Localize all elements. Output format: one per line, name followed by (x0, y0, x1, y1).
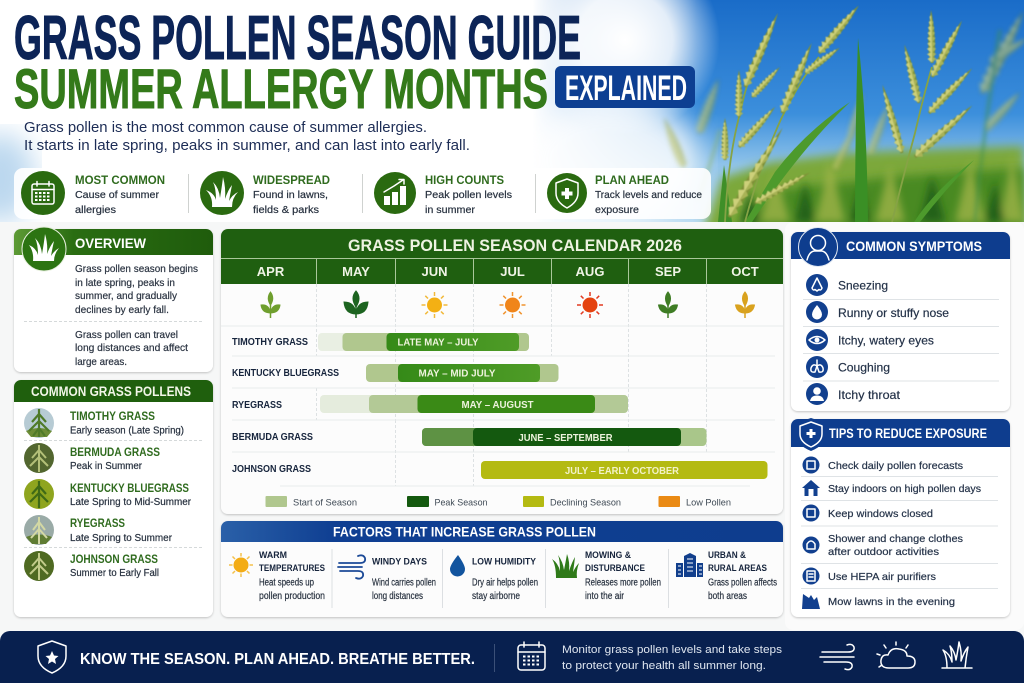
month labels: OCT (731, 264, 759, 279)
symptom: itchy throat (806, 383, 901, 405)
tip: stay indoors: Stay indoors on high pollen days (828, 483, 981, 495)
grass: bermuda: BERMUDA GRASS (70, 447, 160, 459)
factor: windy days: Wind carries pollen (372, 578, 436, 588)
row: ryegrass: MAY – AUGUST (462, 399, 534, 411)
icon: sun and cloud (877, 642, 915, 668)
lower page background (0, 222, 1024, 632)
calendar legend: Start of Season (293, 498, 357, 508)
tip: keep windows closed: Keep windows closed (828, 508, 933, 520)
tip: shower and change clothes: Shower and change clothes (828, 533, 963, 545)
icon: grass (942, 642, 972, 668)
calendar grid (221, 284, 783, 486)
overview text: large areas. (75, 356, 127, 368)
symptom: sneezing: Sneezing (838, 278, 888, 292)
month labels: AUG (576, 264, 604, 279)
tip: shower and change clothes: after outdoor activities (828, 546, 939, 558)
icon: person badge (798, 228, 838, 266)
overview text: summer, and gradually (75, 290, 178, 302)
panel: overview (14, 227, 213, 372)
row: johnson grass: JULY – EARLY OCTOBER (565, 465, 679, 477)
row: bermuda grass: JUNE – SEPTEMBER (518, 432, 613, 444)
factor: urban and rural areas (676, 550, 777, 602)
factor: warm temperatures: pollen production (259, 591, 325, 602)
factor: warm temperatures: WARM (259, 550, 287, 561)
highlight: high counts (374, 172, 512, 216)
factor: mowing and disturbance: MOWING & (585, 550, 631, 561)
panel: common grass pollens (14, 380, 213, 617)
grass: ryegrass: Late Spring to Summer (70, 533, 173, 544)
badge: explained (555, 66, 695, 108)
icon: october leaf (736, 292, 754, 318)
tip: stay indoors (802, 480, 981, 496)
grass: ryegrass: RYEGRASS (70, 518, 125, 530)
footer message: to protect your health all summer long. (562, 660, 766, 672)
calendar legend (266, 496, 731, 508)
highlight: most common: MOST COMMON (75, 175, 165, 187)
calendar legend: Peak Season (434, 498, 488, 508)
icon: august sun (577, 292, 603, 318)
overview text: declines by early fall. (75, 304, 169, 316)
factor: low humidity: stay airborne (472, 591, 520, 602)
icon: april leaf (261, 292, 280, 318)
factors heading: FACTORS THAT INCREASE GRASS POLLEN (333, 524, 596, 540)
symptom: itchy watery eyes (806, 329, 934, 351)
title: SUMMER ALLERGY MONTHS (14, 57, 548, 120)
row: timothy grass (232, 333, 529, 351)
grass: ryegrass (24, 515, 173, 545)
symptom: runny or stuffy nose (806, 301, 949, 323)
highlight: widespread: Found in lawns, (253, 190, 328, 201)
tip: shower and change clothes (802, 533, 963, 558)
calendar legend: Declining Season (550, 498, 621, 508)
icon: wind (820, 644, 854, 670)
factor: mowing and disturbance: Releases more pollen (585, 578, 661, 588)
icon: july sun (500, 292, 526, 318)
overview text: long distances and affect (75, 342, 188, 354)
hero background: sky and grass field (0, 0, 1024, 240)
icon: shield badge (796, 418, 826, 451)
factor: warm temperatures: Heat speeds up (259, 578, 314, 588)
factor: mowing and disturbance: into the air (585, 591, 625, 602)
factor: warm temperatures: TEMPERATURES (259, 563, 325, 574)
badge: explained: EXPLAINED (565, 69, 687, 108)
calendar title: GRASS POLLEN SEASON CALENDAR 2026 (348, 236, 682, 255)
month labels: SEP (655, 264, 681, 279)
foreground seed heads (720, 2, 976, 220)
factor: low humidity: Dry air helps pollen (472, 578, 538, 588)
highlight: widespread: fields & parks (253, 205, 319, 216)
footer banner (0, 631, 1024, 683)
panel: tips to reduce exposure (791, 418, 1010, 617)
factor: windy days: long distances (372, 591, 423, 602)
symptom: itchy watery eyes: Itchy, watery eyes (838, 334, 934, 348)
highlight: high counts: in summer (425, 205, 476, 216)
overview text: Grass pollen can travel (75, 329, 178, 341)
tip: check forecasts: Check daily pollen forecasts (828, 460, 963, 472)
row: bermuda grass (232, 428, 706, 446)
month icons (261, 291, 754, 318)
highlight: widespread: WIDESPREAD (253, 175, 330, 187)
heading: tips to reduce exposure: TIPS TO REDUCE EXPOSURE (829, 426, 987, 441)
month labels (257, 264, 759, 279)
factor: warm temperatures (229, 550, 325, 602)
panel: grass pollen season calendar (221, 229, 783, 514)
month labels: JUL (500, 264, 525, 279)
highlight: plan ahead: Track levels and reduce (595, 190, 702, 201)
heading: common grass pollens: COMMON GRASS POLLENS (31, 384, 191, 399)
overview text: Grass pollen season begins (75, 263, 198, 275)
highlight: plan ahead (547, 173, 702, 216)
heading: common symptoms: COMMON SYMPTOMS (846, 239, 982, 254)
highlight: high counts: Peak pollen levels (425, 190, 512, 201)
row: kentucky bluegrass (232, 364, 558, 382)
factor: low humidity (450, 555, 538, 602)
icon: shield (38, 641, 66, 673)
highlight: most common: Cause of summer (75, 190, 160, 201)
calendar legend: Low Pollen (686, 498, 731, 508)
month labels: APR (257, 264, 285, 279)
icon: grass badge (22, 227, 66, 271)
overview text: in late spring, peaks in (75, 277, 175, 289)
intro text: Grass pollen is the most common cause of summer allergies. (24, 120, 427, 136)
row: johnson grass: JOHNSON GRASS (232, 463, 311, 475)
tip: hepa purifiers: Use HEPA air purifiers (828, 571, 936, 583)
factor: windy days (338, 555, 436, 602)
row: kentucky bluegrass: KENTUCKY BLUEGRASS (232, 367, 339, 379)
panel: common symptoms (785, 222, 1024, 630)
grass: kentucky bluegrass (24, 479, 192, 509)
icon: calendar (518, 642, 545, 670)
row: ryegrass: RYEGRASS (232, 399, 282, 411)
tip: mow lawns in the evening (802, 594, 955, 609)
grass: kentucky bluegrass: KENTUCKY BLUEGRASS (70, 483, 189, 495)
factor: mowing and disturbance (552, 550, 661, 602)
row: kentucky bluegrass: MAY – MID JULY (418, 368, 496, 380)
grass: timothy (24, 408, 184, 438)
highlight: most common: allergies (75, 205, 116, 216)
factor: low humidity: LOW HUMIDITY (472, 556, 537, 568)
tip: keep windows closed (802, 504, 933, 522)
intro text (24, 120, 470, 154)
panel: factors that increase grass pollen (221, 521, 783, 617)
tip: check forecasts (802, 456, 963, 474)
row: ryegrass (232, 395, 628, 413)
highlight: most common (21, 171, 165, 216)
factor: urban and rural areas: RURAL AREAS (708, 563, 767, 574)
factor: windy days: WINDY DAYS (372, 556, 427, 568)
month labels: MAY (342, 264, 370, 279)
icon: june sun (422, 292, 448, 318)
footer slogan: KNOW THE SEASON. PLAN AHEAD. BREATHE BETTER. (80, 651, 475, 668)
grass: bermuda: Peak in Summer (70, 461, 143, 472)
title: GRASS POLLEN SEASON GUIDE (14, 4, 581, 73)
highlight: plan ahead: exposure (595, 205, 639, 216)
factor: mowing and disturbance: DISTURBANCE (585, 563, 645, 574)
month labels: JUN (421, 264, 448, 279)
grass: johnson: Summer to Early Fall (70, 568, 159, 579)
footer message: Monitor grass pollen levels and take steps (562, 644, 783, 656)
symptom: sneezing (806, 274, 888, 296)
title (14, 4, 695, 120)
row: bermuda grass: BERMUDA GRASS (232, 431, 313, 443)
grass: johnson: JOHNSON GRASS (70, 554, 158, 566)
highlight: widespread (200, 171, 330, 216)
factor: urban and rural areas: both areas (708, 591, 747, 602)
icon: may leaf (344, 291, 368, 318)
symptom: itchy throat: Itchy throat (838, 388, 901, 402)
grass: timothy: TIMOTHY GRASS (70, 411, 155, 423)
row: timothy grass: LATE MAY – JULY (398, 336, 478, 348)
tip: mow lawns in the evening: Mow lawns in the evening (828, 596, 955, 608)
factor: urban and rural areas: URBAN & (708, 550, 746, 561)
footer message (562, 644, 783, 672)
highlights strip (14, 168, 711, 219)
icon: september leaf (658, 292, 678, 318)
factor: urban and rural areas: Grass pollen affects (708, 578, 777, 588)
tip: hepa purifiers (802, 568, 936, 584)
symptom: coughing (806, 356, 890, 378)
symptom: runny or stuffy nose: Runny or stuffy nose (838, 306, 949, 320)
grass: johnson (24, 551, 159, 581)
highlight: high counts: HIGH COUNTS (425, 175, 504, 187)
grass: kentucky bluegrass: Late Spring to Mid-Summer (70, 497, 192, 508)
overview text (24, 263, 203, 368)
highlight: plan ahead: PLAN AHEAD (595, 175, 669, 187)
grass: bermuda (24, 443, 160, 473)
blurred background seed heads (659, 7, 1024, 222)
grass: timothy: Early season (Late Spring) (70, 426, 184, 436)
intro text: It starts in late spring, peaks in summer, and can last into early fall. (24, 138, 470, 154)
row: johnson grass (232, 461, 768, 479)
heading: overview: OVERVIEW (75, 235, 147, 251)
row: timothy grass: TIMOTHY GRASS (232, 336, 308, 348)
symptom: coughing: Coughing (838, 360, 890, 374)
